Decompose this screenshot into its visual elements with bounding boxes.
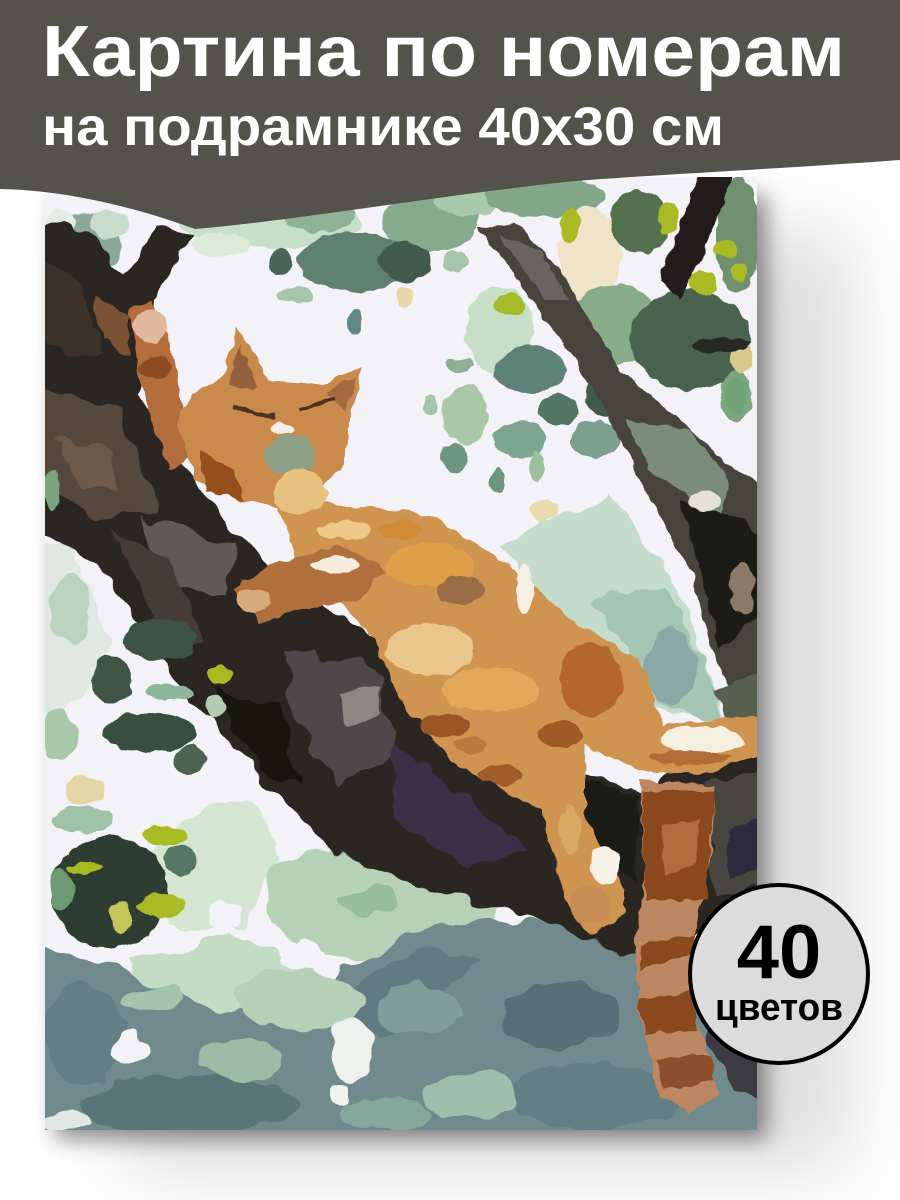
painting: sleeping ginger cat on a tree — [45, 177, 757, 1130]
top foliage — [46, 177, 760, 520]
canvas shadow — [55, 195, 850, 1170]
badge label: цветов — [715, 987, 843, 1029]
title line 2: на подрамнике 40х30 см — [42, 97, 724, 157]
cat body — [270, 490, 790, 935]
blue-grey ground — [45, 916, 757, 1130]
painting background — [45, 184, 757, 980]
title line 1: Картина по номерам — [42, 12, 845, 92]
main tree branch — [45, 221, 757, 1098]
ginger cat — [130, 300, 790, 935]
right tree trunk — [477, 177, 757, 718]
cat fur markings — [386, 543, 474, 587]
cat raised arm — [128, 300, 188, 470]
left leaves — [44, 470, 233, 948]
background foliage haze — [45, 493, 722, 1014]
badge: 40 colours — [690, 885, 868, 1063]
badge number: 40 — [737, 910, 821, 995]
cat front paw — [235, 545, 385, 622]
cat head — [175, 325, 362, 510]
header banner — [0, 0, 900, 229]
tail — [635, 780, 718, 1115]
